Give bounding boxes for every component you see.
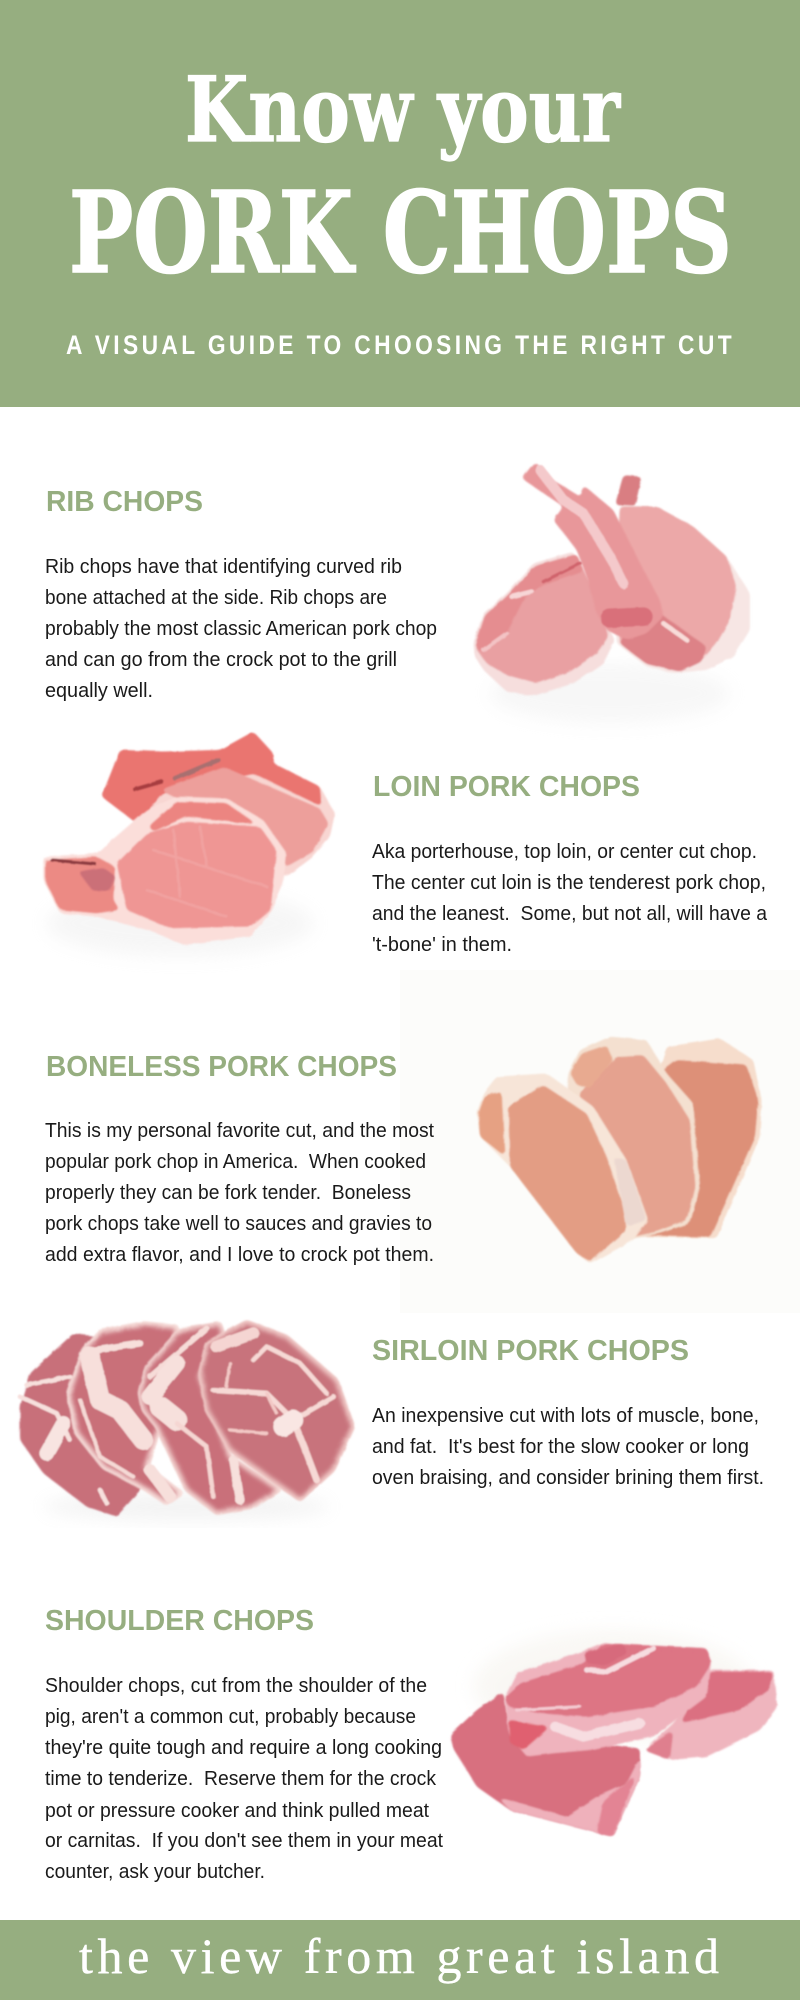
image: boneless chops xyxy=(477,1037,762,1264)
text: rib chops description: equally well. xyxy=(45,680,153,702)
text: shoulder description: or carnitas. If you don't see them in your meat xyxy=(45,1830,443,1852)
text: boneless description: properly they can be fork tender. Boneless xyxy=(45,1182,411,1204)
panel: boneless pork chops xyxy=(45,1037,762,1266)
text: boneless description: pork chops take well to sauces and gravies to xyxy=(45,1213,432,1235)
text: boneless description: This is my personal favorite cut, and the most xyxy=(45,1120,434,1142)
text: boneless description: popular pork chop in America. When cooked xyxy=(45,1151,426,1173)
text: shoulder description: time to tenderize. Reserve them for the crock xyxy=(45,1768,437,1790)
heading: rib chops: RIB CHOPS xyxy=(46,486,203,518)
text: shoulder description xyxy=(45,1675,443,1883)
text: boneless description: add extra flavor, and I love to crock pot them. xyxy=(45,1244,434,1266)
text: loin description: The center cut loin is the tenderest pork chop, xyxy=(372,872,766,894)
footer: the view from great island: the view from great island xyxy=(79,1928,719,1984)
text: shoulder description: Shoulder chops, cut from the shoulder of the xyxy=(45,1675,427,1697)
image: sirloin chops xyxy=(20,1322,353,1520)
text: rib chops description: bone attached at the side. Rib chops are xyxy=(45,587,387,609)
text: boneless description xyxy=(45,1120,434,1266)
text: shoulder description: pig, aren't a common cut, probably because xyxy=(45,1706,416,1728)
text: loin description xyxy=(372,841,768,956)
text: rib chops description: Rib chops have that identifying curved rib xyxy=(45,556,402,578)
text: rib chops description: probably the most classic American pork chop xyxy=(45,618,437,640)
image: loin chops xyxy=(43,732,335,957)
panel: shoulder chops xyxy=(45,1605,777,1883)
text: loin description: Aka porterhouse, top loin, or center cut chop. xyxy=(372,841,757,863)
text: loin description: and the leanest. Some, but not all, will have a xyxy=(372,903,768,925)
title: Know your: Know your xyxy=(185,57,621,163)
panel: rib chops xyxy=(45,462,750,723)
panel: sirloin pork chops xyxy=(20,1322,764,1520)
image: shoulder chops xyxy=(450,1630,777,1837)
heading: sirloin pork chops: SIRLOIN PORK CHOPS xyxy=(372,1335,689,1367)
text: sirloin description xyxy=(372,1405,764,1489)
text: rib chops description: and can go from the crock pot to the grill xyxy=(45,649,397,671)
panel: boneless background xyxy=(400,970,800,1313)
text: sirloin description: oven braising, and consider brining them first. xyxy=(372,1467,764,1489)
text: rib chops description xyxy=(45,556,437,702)
text: sirloin description: and fat. It's best for the slow cooker or long xyxy=(372,1436,749,1458)
text: shoulder description: counter, ask your butcher. xyxy=(45,1861,265,1883)
text: loin description: 't-bone' in them. xyxy=(372,934,512,956)
image: rib chops xyxy=(473,462,750,723)
heading: boneless pork chops: BONELESS PORK CHOPS xyxy=(46,1051,397,1083)
heading: shoulder chops: SHOULDER CHOPS xyxy=(45,1605,314,1637)
panel: loin pork chops xyxy=(43,732,768,957)
text: shoulder description: they're quite tough and require a long cooking xyxy=(45,1737,442,1759)
panel: footer banner xyxy=(0,1920,800,2000)
text: shoulder description: pot or pressure cooker and think pulled meat xyxy=(45,1800,429,1822)
panel: header banner xyxy=(0,0,800,407)
text: sirloin description: An inexpensive cut with lots of muscle, bone, xyxy=(372,1405,759,1427)
heading: loin pork chops: LOIN PORK CHOPS xyxy=(373,771,640,803)
